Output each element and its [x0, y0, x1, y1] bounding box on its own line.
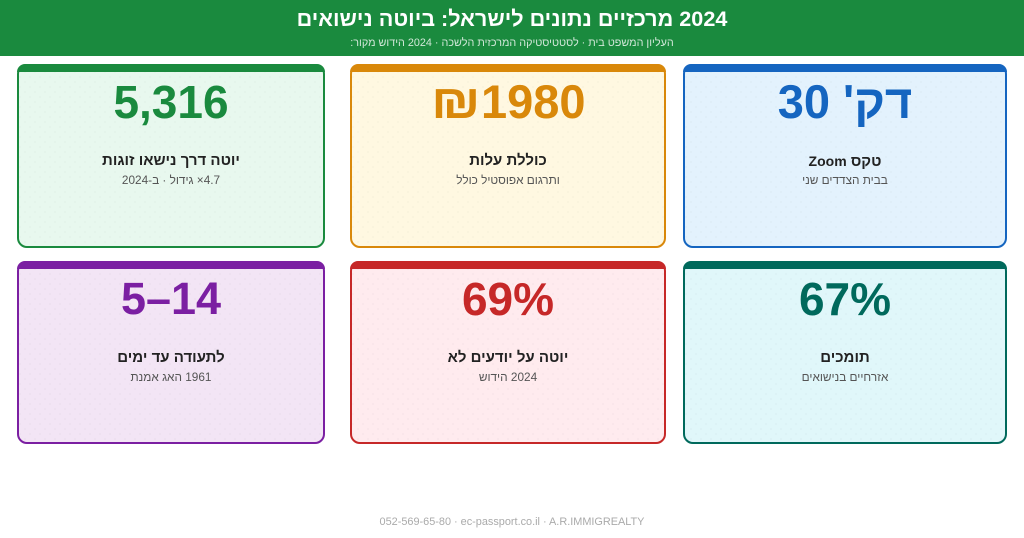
sub-label: 2024 הידוש: [479, 370, 537, 384]
title: 2024 מרכזיים נתונים לישראל: ביוטה נישואים: [297, 6, 727, 31]
panel: 30 minutes Zoom ceremony: [683, 64, 1007, 248]
footer contact line: 052-569-65-80 · ec-passport.co.il · A.R.IMMIGREALTY: [380, 516, 644, 528]
big number: 1980: [481, 75, 586, 128]
panel: 67% support: [683, 261, 1007, 444]
sub-label: ותרגום אפוסטיל כולל: [456, 173, 560, 187]
accent bar: [17, 64, 325, 72]
big number: 5–14: [121, 273, 221, 324]
accent bar: [17, 261, 325, 269]
big number: 5,316: [113, 76, 229, 128]
label: יוטה על יודעים לא: [448, 349, 568, 366]
big number: 67%: [799, 273, 891, 325]
sub-label: אזרחיים בנישואים: [802, 370, 888, 384]
panel: 5-14 days: [17, 261, 325, 444]
label: טקס Zoom: [809, 153, 881, 170]
sub-label: בבית הצדדים שני: [802, 173, 888, 187]
label: לתעודה עד ימים: [117, 349, 225, 366]
label: יוטה דרך נישאו זוגות: [102, 152, 240, 169]
accent bar: [350, 64, 666, 72]
accent bar: [683, 64, 1007, 72]
panel: 69% unaware: [350, 261, 666, 444]
big number: [431, 75, 586, 128]
panel: 1980 shekel fee: [350, 64, 666, 248]
sub-label: 4.7× גידול · ב-2024: [122, 173, 220, 187]
big number: 69%: [462, 273, 554, 325]
big number: ₪: [431, 75, 481, 128]
source subtitle: העליון המשפט בית · לסטטיסטיקה המרכזית הלשכה · 2024 הידוש מקור:: [350, 37, 674, 49]
header banner: [0, 0, 1024, 56]
label: כוללת עלות: [469, 152, 547, 169]
accent bar: [683, 261, 1007, 269]
panel: 5,316 couples: [17, 64, 325, 248]
accent bar: [350, 261, 666, 269]
big number: דק' 30: [778, 75, 912, 128]
sub-label: 1961 האג אמנת: [131, 370, 211, 384]
label: תומכים: [820, 349, 870, 366]
